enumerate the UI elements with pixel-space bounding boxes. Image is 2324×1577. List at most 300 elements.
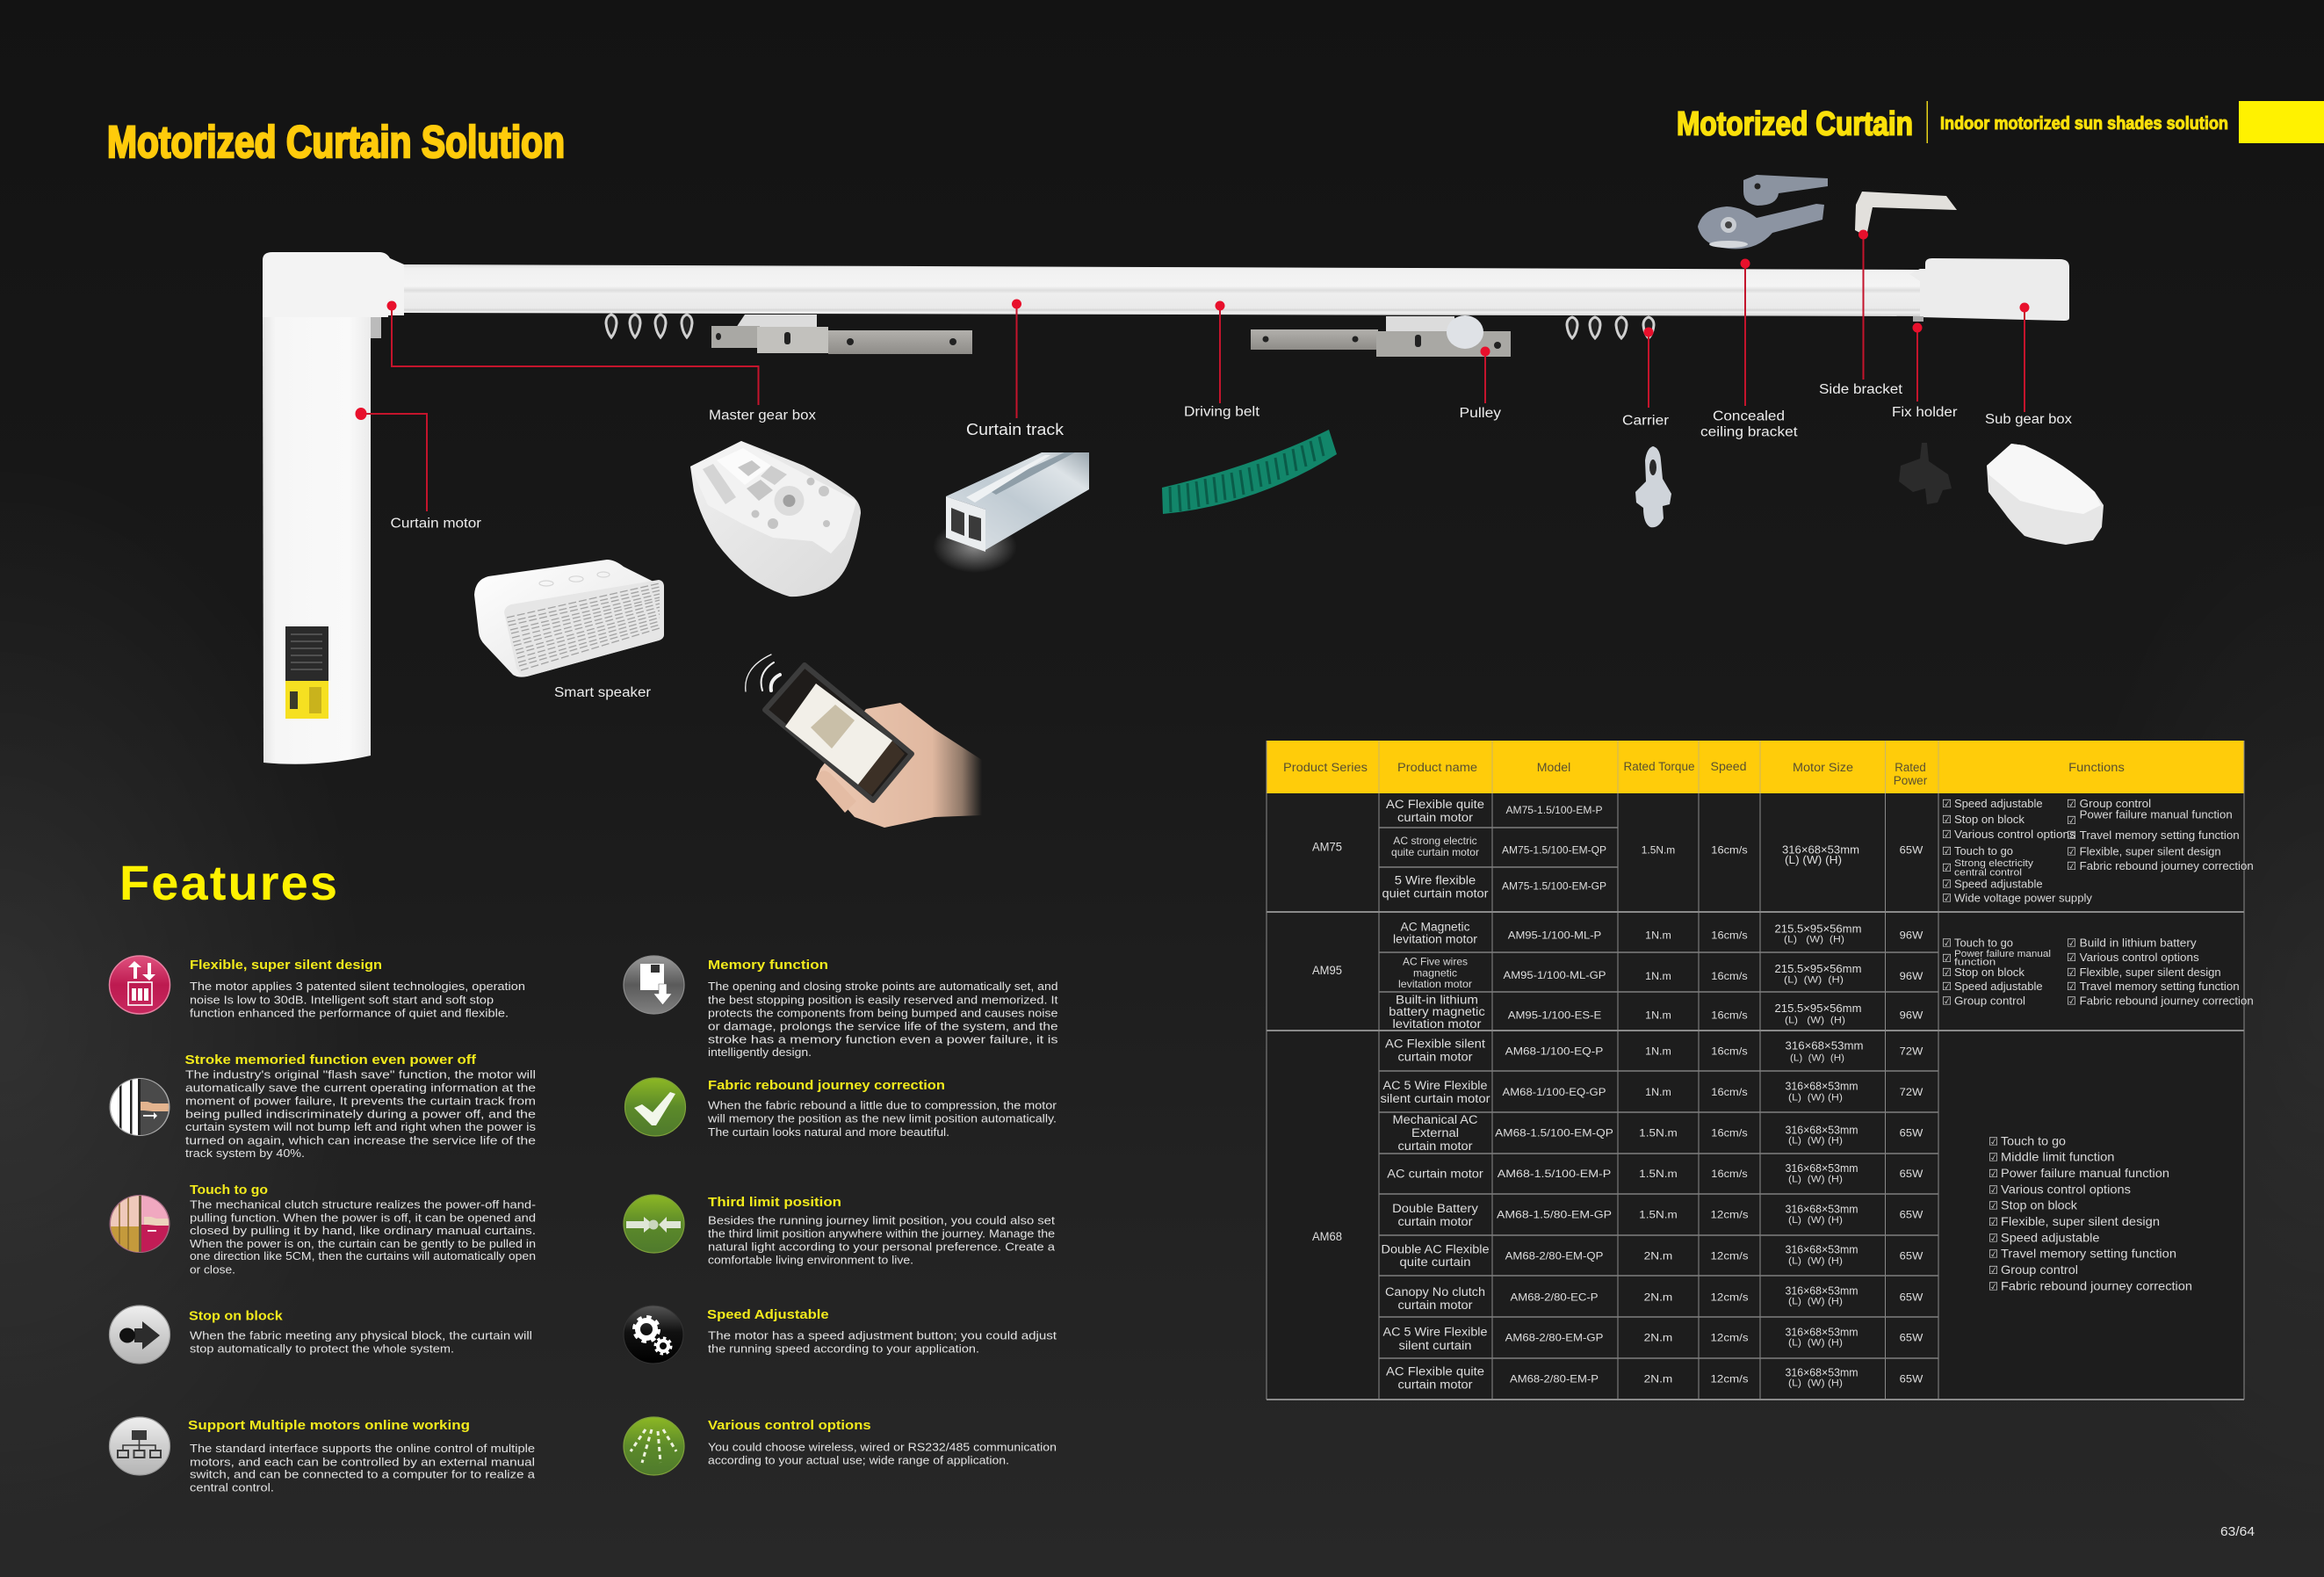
functions AM95: ☑ (1942, 937, 1952, 950)
series AM68: 65W (1900, 1250, 1923, 1262)
series AM68: 2N.m (1644, 1250, 1672, 1262)
series AM68: AC Flexible silent (1385, 1038, 1485, 1051)
series AM95: AM95 (1312, 964, 1342, 977)
series AM68: 316×68×53mm (1785, 1081, 1858, 1093)
series AM68: AM68-1/100-EQ-GP (1502, 1086, 1606, 1098)
series AM75: quite curtain motor (1391, 846, 1479, 858)
functions AM75: ☑ (1942, 891, 1952, 904)
part labels: Pulley (1460, 406, 1501, 421)
series AM68: curtain motor (1398, 1051, 1473, 1064)
series AM75: 65W (1900, 844, 1923, 857)
feature: Touch to go: The mechanical clutch structure realizes the power-off hand- (190, 1197, 536, 1211)
feature: Fabric rebound journey correction: will memory the position as the new limit position automatically. (707, 1112, 1057, 1125)
series AM95: AM95-1/100-ES-E (1508, 1009, 1601, 1021)
curtain track rail (404, 264, 1920, 316)
functions AM68: ☑ (1988, 1279, 1998, 1292)
master bracket (711, 315, 972, 354)
series AM68: 16cm/s (1711, 1168, 1748, 1180)
functions AM75: Flexible, super silent design (2080, 845, 2221, 857)
series AM68: AM68 (1312, 1230, 1342, 1243)
feature: Third limit position: the third limit position anywhere within the journey. Manage the (708, 1227, 1055, 1241)
part labels: Master gear box (709, 408, 816, 423)
table header: Speed (1711, 760, 1746, 773)
functions AM95: ☑ (2067, 937, 2076, 950)
feature: Support Multiple motors online working: Support Multiple motors online working (188, 1418, 470, 1433)
feature: Touch to go: one direction like 5CM, then the curtains will automatically open (190, 1249, 536, 1262)
series AM68: 1.5N.m (1639, 1127, 1678, 1139)
series AM75: 16cm/s (1711, 844, 1748, 857)
functions AM95: Stop on block (1954, 966, 2025, 979)
feature: Speed Adjustable: the running speed according to your application. (708, 1342, 979, 1356)
feature: Stroke memoried function: moment of power failure, It prevents the curtain track from (185, 1094, 536, 1107)
table header (1267, 741, 2244, 793)
functions AM75: ☑ (2067, 859, 2076, 872)
feature: Third limit position: Besides the running journey limit position, you could also set (708, 1214, 1055, 1226)
series AM95: AM95-1/100-ML-P (1508, 930, 1601, 942)
heading: Features: Features (119, 855, 337, 910)
functions AM95: Various control options (2080, 951, 2199, 964)
functions AM95 (1942, 937, 2254, 1008)
feature: Third limit position: natural light according to your personal preference. Create a (708, 1240, 1056, 1253)
feature: Fabric rebound journey correction: The curtain looks natural and more beautiful. (708, 1125, 949, 1139)
feature: Touch to go: pulling function. When the power is off, it can be opened and (190, 1211, 536, 1224)
icon: elevator (109, 956, 170, 1014)
series AM68: 12cm/s (1711, 1250, 1748, 1262)
feature: Touch to go: closed by pulling it by hand, like ordinary manual curtains. (190, 1224, 536, 1237)
series AM68 (1312, 1038, 1923, 1392)
functions AM75: ☑ (1942, 828, 1952, 841)
feature: Support Multiple motors online working (109, 1417, 536, 1494)
part labels: Sub gear box (1985, 412, 2072, 427)
functions AM75: Group control (2080, 798, 2151, 810)
feature: Stroke memoried function (109, 1053, 537, 1160)
feature: Stroke memoried function: track system by 40%. (185, 1147, 305, 1160)
feature: Various control options: according to your actual use; wide range of application. (708, 1454, 1009, 1467)
feature: Stroke memoried function: The industry's original "flash save" function, the motor will (185, 1067, 536, 1081)
series AM68: (L) (W) (H) (1788, 1338, 1843, 1349)
feature: Touch to go (109, 1183, 536, 1276)
phone body (765, 665, 912, 800)
product diagram: motor and track (263, 252, 2069, 764)
series AM75: curtain motor (1397, 811, 1474, 824)
series AM95: 96W (1900, 970, 1923, 982)
icon: phone in hand with signal (746, 655, 982, 828)
series AM95: 16cm/s (1711, 970, 1748, 982)
icon: curtain with hand (109, 1078, 170, 1137)
series AM68: 1.5N.m (1639, 1168, 1678, 1180)
part labels: ceiling bracket (1700, 425, 1798, 439)
part labels: Smart speaker (554, 685, 651, 700)
series AM68: AC 5 Wire Flexible (1382, 1326, 1488, 1339)
series AM68: Double AC Flexible (1381, 1243, 1490, 1256)
icon: concealed ceiling bracket (1698, 175, 1828, 249)
functions AM68: Travel memory setting function (2001, 1247, 2176, 1261)
series AM68: AM68-2/80-EM-P (1510, 1372, 1599, 1385)
functions AM75: ☑ (2067, 814, 2076, 827)
series AM95: Built-in lithium (1396, 994, 1478, 1007)
series AM95: (L) (W) (H) (1784, 934, 1844, 944)
table header: Rated (1895, 761, 1926, 774)
functions AM75: Various control options (1954, 828, 2075, 841)
series AM68: 1N.m (1645, 1086, 1671, 1098)
series AM68: Mechanical AC (1393, 1113, 1478, 1126)
feature: Third limit position: comfortable living environment to live. (708, 1254, 913, 1267)
icon: side bracket (1855, 192, 1957, 236)
series AM68: AM68-2/80-EM-QP (1505, 1250, 1603, 1262)
series AM75: 1.5N.m (1642, 844, 1675, 857)
series AM68: (L) (W) (H) (1788, 1378, 1843, 1388)
feature: Memory function: The opening and closing stroke points are automatically set, and (708, 980, 1057, 993)
series AM68: curtain motor (1398, 1139, 1473, 1153)
sub heading: Indoor motorized sun shades solution (1940, 113, 2228, 134)
series AM95: battery magnetic (1389, 1005, 1485, 1018)
icon: master gear box (690, 441, 861, 597)
feature: Speed Adjustable (624, 1306, 1057, 1364)
page number: 63/64 (2220, 1524, 2255, 1539)
series AM68: AC 5 Wire Flexible (1382, 1079, 1488, 1092)
series AM68: 12cm/s (1711, 1372, 1748, 1385)
functions AM95: ☑ (1942, 951, 1952, 965)
functions AM68: Fabric rebound journey correction (2001, 1278, 2192, 1292)
feature: Flexible, super silent design: The motor applies 3 patented silent technologies, operation (190, 980, 525, 993)
series AM75: AM75-1.5/100-EM-P (1505, 804, 1602, 816)
series AM75: AM75-1.5/100-EM-QP (1502, 844, 1606, 857)
thumb (816, 770, 856, 813)
series AM68: Canopy No clutch (1385, 1285, 1485, 1298)
feature: Stroke memoried function: curtain system will not bump left and right when the power is (185, 1120, 537, 1133)
functions AM68: ☑ (1988, 1248, 1998, 1261)
feature: Fabric rebound journey correction (625, 1078, 1057, 1139)
functions AM68: ☑ (1988, 1215, 1998, 1228)
icon: network (109, 1417, 170, 1475)
series AM68: 12cm/s (1711, 1291, 1748, 1303)
functions AM75: ☑ (1942, 844, 1952, 857)
feature: Speed Adjustable: Speed Adjustable (707, 1307, 829, 1322)
feature: Touch to go: or close. (190, 1262, 235, 1276)
icon: arrows to point (624, 1195, 684, 1253)
feature: Stroke memoried function: being pulled indiscriminately during a power off, and the (185, 1107, 536, 1121)
series AM68: AM68-1.5/80-EM-GP (1497, 1209, 1612, 1221)
series AM95: 1N.m (1645, 1009, 1671, 1021)
series AM68: 65W (1900, 1291, 1923, 1303)
functions AM68: Power failure manual function (2001, 1166, 2169, 1180)
icon: golden curtain with hand (109, 1195, 171, 1253)
functions AM75: ☑ (2067, 797, 2076, 810)
feature: Speed Adjustable: The motor has a speed adjustment button; you could adjust (708, 1328, 1057, 1342)
series AM68: AM68-1.5/100-EM-P (1498, 1168, 1611, 1180)
series AM68: AC Flexible quite (1386, 1365, 1484, 1378)
series AM75: 5 Wire flexible (1395, 874, 1476, 887)
feature: Fabric rebound journey correction: When the fabric rebound a little due to compression, the motor (708, 1098, 1057, 1112)
part labels: Carrier (1622, 413, 1669, 429)
feature: Memory function: stroke has a memory function even a power failure, it is (708, 1033, 1058, 1045)
header: brand strip (1677, 101, 2324, 143)
feature: Memory function: Memory function (708, 958, 828, 973)
functions AM68: ☑ (1988, 1167, 1998, 1180)
feature: Third limit position (624, 1195, 1056, 1267)
series AM75: 316×68×53mm (1782, 844, 1859, 857)
series AM68: 316×68×53mm (1785, 1367, 1858, 1379)
feature: Touch to go: When the power is on, the curtain can be gently to be pulled in (190, 1237, 536, 1250)
functions AM68: ☑ (1988, 1263, 1998, 1277)
series AM95: AC Five wires (1403, 956, 1468, 968)
functions AM95: function (1954, 958, 1996, 968)
table header: Power (1894, 774, 1928, 787)
functions AM75: Wide voltage power supply (1954, 892, 2093, 904)
series AM68: 65W (1900, 1127, 1923, 1139)
functions AM68: Flexible, super silent design (2001, 1214, 2160, 1228)
series AM68: silent curtain (1398, 1339, 1472, 1352)
functions AM95: ☑ (2067, 966, 2076, 979)
series AM95: magnetic (1413, 967, 1457, 980)
functions AM95: Touch to go (1954, 937, 2013, 950)
curtain motor body (263, 317, 371, 764)
functions AM75: Fabric rebound journey correction (2080, 860, 2254, 872)
functions AM95: ☑ (1942, 966, 1952, 979)
series AM95: 1N.m (1645, 930, 1671, 942)
feature: Various control options: You could choose wireless, wired or RS232/485 communication (708, 1441, 1057, 1453)
functions AM95: ☑ (2067, 951, 2076, 964)
series AM95: 215.5×95×56mm (1774, 1002, 1862, 1015)
functions AM75: Speed adjustable (1954, 798, 2043, 810)
functions AM68: Group control (2001, 1262, 2078, 1277)
series AM68: 316×68×53mm (1785, 1327, 1858, 1339)
feature: Memory function: protects the components from being bumped and causes noise (708, 1007, 1057, 1020)
series AM68: curtain motor (1398, 1215, 1473, 1228)
functions AM75: Travel memory setting function (2080, 829, 2240, 842)
series AM75: AC strong electric (1393, 835, 1477, 847)
feature: Stop on block: When the fabric meeting any physical block, the curtain will (190, 1328, 532, 1342)
series AM68: (L) (W) (H) (1788, 1256, 1843, 1267)
series AM68: 316×68×53mm (1785, 1244, 1858, 1256)
feature: Support Multiple motors online working: switch, and can be connected to a computer for to realize a (190, 1468, 536, 1481)
pulley wheel (1447, 315, 1483, 349)
part labels: Driving belt (1184, 404, 1260, 420)
functions AM95: Group control (1954, 995, 2025, 1008)
series AM68: 65W (1900, 1332, 1923, 1344)
left carriers (606, 315, 692, 337)
series AM68: 65W (1900, 1372, 1923, 1385)
motor head (263, 252, 404, 317)
feature: Touch to go: Touch to go (190, 1183, 268, 1197)
table header: Product Series (1283, 761, 1368, 774)
feature: Fabric rebound journey correction: Fabric rebound journey correction (708, 1078, 945, 1093)
functions AM75: Touch to go (1954, 845, 2013, 857)
part labels (390, 382, 2072, 700)
functions AM75: Power failure manual function (2080, 809, 2233, 821)
feature: Stroke memoried function: Stroke memoried function even power off (184, 1053, 477, 1067)
feature: Flexible, super silent design: function enhanced the performance of quiet and flexible. (190, 1007, 509, 1020)
series AM95 (1312, 920, 1923, 1031)
yellow tab (2239, 101, 2324, 143)
series AM95: 215.5×95×56mm (1774, 963, 1862, 975)
series AM68: External (1411, 1126, 1459, 1139)
part labels: Side bracket (1819, 382, 1903, 397)
series AM68: AM68-1.5/100-EM-QP (1495, 1127, 1613, 1139)
series AM68: (L) (W) (H) (1788, 1215, 1843, 1226)
functions AM75: ☑ (2067, 844, 2076, 857)
series AM95: levitation motor (1393, 932, 1478, 945)
functions AM68: Middle limit function (2001, 1150, 2115, 1164)
icon: sub gear box part (1987, 444, 2104, 545)
phone screen (785, 684, 892, 785)
series AM68: (L) (W) (H) (1788, 1174, 1843, 1184)
icon: spray lines (624, 1417, 684, 1475)
functions AM95: Flexible, super silent design (2080, 966, 2221, 979)
series AM95: 1N.m (1645, 970, 1671, 982)
functions AM68: Speed adjustable (2001, 1231, 2100, 1245)
functions AM75 (1942, 797, 2254, 904)
functions AM75: ☑ (1942, 797, 1952, 810)
series AM75: AC Flexible quite (1386, 798, 1484, 811)
table header: Product name (1397, 761, 1477, 774)
series AM68: AC curtain motor (1387, 1168, 1483, 1181)
icon: block and arrow (109, 1306, 170, 1364)
table header: Motor Size (1793, 761, 1853, 774)
series AM68: (L) (W) (H) (1788, 1136, 1843, 1147)
functions AM68 (1988, 1133, 2192, 1292)
functions AM68: Various control options (2001, 1183, 2131, 1197)
functions AM68: ☑ (1988, 1151, 1998, 1164)
series AM95: AC Magnetic (1400, 920, 1470, 933)
motor label (285, 626, 328, 719)
functions AM75: ☑ (1942, 861, 1952, 874)
feature: Flexible, super silent design: Flexible, super silent design (190, 958, 382, 973)
series AM95: 215.5×95×56mm (1774, 923, 1862, 936)
icon: gears (624, 1306, 683, 1364)
functions AM95: Travel memory setting function (2080, 980, 2240, 993)
feature: Support Multiple motors online working: The standard interface supports the online control of multiple (190, 1442, 535, 1455)
series AM75: AM75 (1312, 841, 1342, 854)
title: Motorized Curtain Solution (107, 117, 565, 167)
functions AM68: ☑ (1988, 1199, 1998, 1212)
series AM68: (L) (W) (H) (1790, 1053, 1844, 1063)
icon: curtain track profile (933, 452, 1089, 573)
feature: Stroke memoried function: automatically save the current operating information at the (185, 1081, 536, 1095)
functions AM68: ☑ (1988, 1134, 1998, 1147)
feature: Various control options: Various control options (708, 1418, 871, 1433)
series AM68: 72W (1900, 1045, 1923, 1057)
series AM68: 16cm/s (1711, 1086, 1748, 1098)
series AM68: (L) (W) (H) (1788, 1297, 1843, 1307)
table header: Rated Torque (1623, 760, 1695, 773)
part labels: Curtain track (966, 421, 1065, 438)
series AM68: AM68-2/80-EC-P (1511, 1291, 1599, 1303)
part labels: Concealed (1713, 409, 1785, 423)
series AM95: (L) (W) (H) (1784, 974, 1844, 985)
functions AM68: Stop on block (2001, 1198, 2078, 1212)
feature: Memory function: or damage, prolongs the service life of the system, and the (708, 1020, 1057, 1033)
functions AM95: Fabric rebound journey correction (2080, 995, 2254, 1008)
series AM68: 1.5N.m (1639, 1209, 1678, 1221)
series AM75: AM75-1.5/100-EM-GP (1502, 880, 1606, 893)
series AM68: 72W (1900, 1086, 1923, 1098)
functions AM68: ☑ (1988, 1183, 1998, 1197)
series AM75 (1312, 798, 1923, 901)
feature: Stop on block: Stop on block (189, 1308, 283, 1323)
functions AM95: Build in lithium battery (2080, 937, 2198, 950)
series AM68: 65W (1900, 1168, 1923, 1180)
functions AM75: Speed adjustable (1954, 878, 2043, 890)
series AM68: curtain motor (1398, 1378, 1473, 1392)
icon: driving belt (1162, 430, 1337, 514)
heading: Motorized Curtain: Motorized Curtain (1677, 105, 1913, 142)
functions AM75: ☑ (1942, 877, 1952, 890)
series AM95: levitation motor (1393, 1017, 1482, 1031)
table cells background (1267, 793, 2244, 1400)
series AM68: (L) (W) (H) (1788, 1092, 1843, 1103)
feature: Stop on block (109, 1306, 532, 1364)
feature: Support Multiple motors online working: motors, and each can be controlled by an external manual (190, 1455, 535, 1468)
feature: Memory function: intelligently design. (708, 1045, 812, 1059)
callouts: red leader lines (361, 235, 2024, 511)
series AM68: 12cm/s (1711, 1209, 1748, 1221)
functions AM75: Stop on block (1954, 814, 2025, 826)
series AM68: 316×68×53mm (1785, 1162, 1858, 1175)
series AM68: AM68-2/80-EM-GP (1505, 1332, 1603, 1344)
series AM75: (L) (W) (H) (1785, 854, 1842, 866)
functions AM95: Power failure manual (1954, 949, 2051, 959)
icon: fix holder (1899, 443, 1952, 504)
series AM95: levitation motor (1398, 978, 1472, 990)
series AM68: Double Battery (1392, 1202, 1478, 1215)
series AM68: AM68-1/100-EQ-P (1505, 1045, 1603, 1057)
feature: Support Multiple motors online working: central control. (190, 1481, 274, 1494)
feature: Flexible, super silent design (109, 956, 525, 1020)
functions AM95: ☑ (2067, 995, 2076, 1008)
series AM68: 2N.m (1644, 1291, 1672, 1303)
feature: Flexible, super silent design: noise Is low to 30dB. Intelligent soft start and soft stop (190, 993, 494, 1006)
series AM68: curtain motor (1398, 1298, 1473, 1312)
series AM68: quite curtain (1400, 1255, 1470, 1269)
signal waves (746, 655, 780, 691)
functions AM95: ☑ (2067, 980, 2076, 993)
right carriers (1567, 317, 1654, 338)
feature: Memory function: the best stopping position is easily reserved and memorized. It (708, 993, 1058, 1006)
functions AM95: ☑ (1942, 995, 1952, 1008)
series AM75: quiet curtain motor (1382, 887, 1489, 901)
series AM68: silent curtain motor (1381, 1092, 1490, 1105)
feature: Stroke memoried function: turned on again, which can increase the service life of the (185, 1133, 536, 1147)
part labels: Fix holder (1892, 405, 1957, 420)
series AM68: 316×68×53mm (1785, 1125, 1858, 1137)
functions AM75: ☑ (1942, 813, 1952, 826)
series AM68: 65W (1900, 1209, 1923, 1221)
functions AM68: Touch to go (2001, 1133, 2066, 1147)
functions AM95: ☑ (1942, 980, 1952, 993)
series AM68: 2N.m (1644, 1332, 1672, 1344)
series AM68: 16cm/s (1711, 1045, 1748, 1057)
icon: check mark (625, 1078, 685, 1136)
series AM68: 1N.m (1645, 1045, 1671, 1057)
series AM68: 316×68×53mm (1785, 1204, 1858, 1216)
part labels: Curtain motor (390, 517, 481, 531)
series AM68: 12cm/s (1711, 1332, 1748, 1344)
series AM95: 96W (1900, 930, 1923, 942)
series AM95: 16cm/s (1711, 1009, 1748, 1021)
table header: Model (1537, 761, 1570, 774)
functions AM75: central control (1954, 868, 2022, 879)
specification table (1267, 741, 2254, 1400)
series AM95: AM95-1/100-ML-GP (1504, 969, 1606, 981)
right bracket with pulley (1251, 315, 1511, 357)
feature: Stop on block: stop automatically to protect the whole system. (190, 1342, 454, 1356)
feature: Memory function (624, 956, 1058, 1059)
series AM68: 16cm/s (1711, 1127, 1748, 1139)
series AM68: 2N.m (1644, 1372, 1672, 1385)
functions AM68: ☑ (1988, 1232, 1998, 1245)
series AM68: 316×68×53mm (1785, 1285, 1858, 1298)
